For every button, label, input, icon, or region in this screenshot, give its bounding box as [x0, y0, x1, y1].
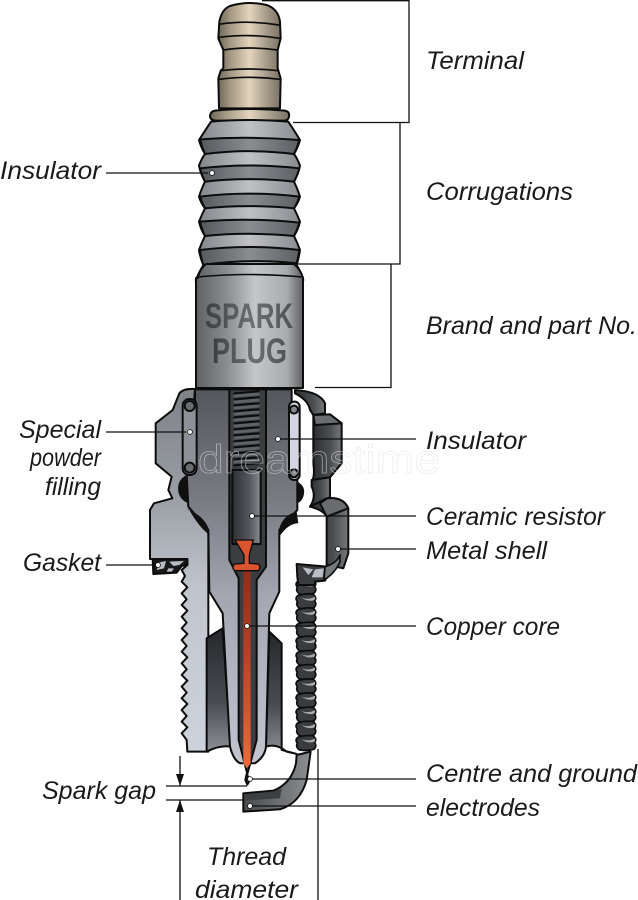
brand lettering: SPARK: [205, 297, 293, 336]
label: centre and ground electrodes: electrodes: [426, 794, 540, 822]
label: thread diameter: Thread: [207, 843, 287, 871]
label: corrugations: Corrugations: [426, 178, 573, 206]
powder filling: [183, 399, 300, 480]
label: brand and part number: Brand and part No.: [426, 312, 637, 340]
terminal: [210, 3, 289, 121]
threads right side: [296, 580, 316, 751]
brand lettering: [205, 297, 293, 371]
outer shell exterior: [295, 390, 348, 568]
label: centre and ground electrodes: [426, 760, 638, 822]
pointer dots: [156, 171, 340, 808]
ground electrode: [243, 752, 311, 812]
brand lettering: PLUG: [212, 332, 287, 371]
label: centre and ground electrodes: Centre and ground: [426, 760, 638, 788]
label: gasket: Gasket: [23, 549, 102, 577]
gaskets: [153, 555, 340, 585]
insulator section: [178, 389, 304, 763]
label: thread diameter: [195, 843, 300, 900]
label: special powder filling: Special: [19, 416, 102, 444]
label: special powder filling: powder: [29, 444, 102, 472]
label: copper core: Copper core: [426, 613, 560, 641]
label: insulator upper: Insulator: [0, 157, 103, 185]
copper core: [233, 540, 260, 785]
label: special powder filling: filling: [45, 473, 101, 501]
corrugations: [196, 120, 303, 280]
label: spark gap: Spark gap: [42, 777, 156, 805]
label: ceramic resistor: Ceramic resistor: [426, 503, 607, 531]
watermark: dreamstime: [198, 438, 440, 482]
label: special powder filling: [19, 416, 102, 501]
copper head: [233, 540, 260, 571]
label: insulator lower: Insulator: [426, 427, 528, 455]
brand body with spark plug lettering: [196, 264, 303, 388]
label: terminal: Terminal: [426, 47, 525, 75]
spark gap arrows: [176, 774, 184, 812]
leader lines and brackets: [106, 1, 416, 900]
spark cavity: [207, 628, 231, 752]
label: metal shell: Metal shell: [426, 537, 548, 565]
spring and ceramic resistor: [229, 389, 266, 774]
metal shell cut section: [150, 389, 297, 754]
